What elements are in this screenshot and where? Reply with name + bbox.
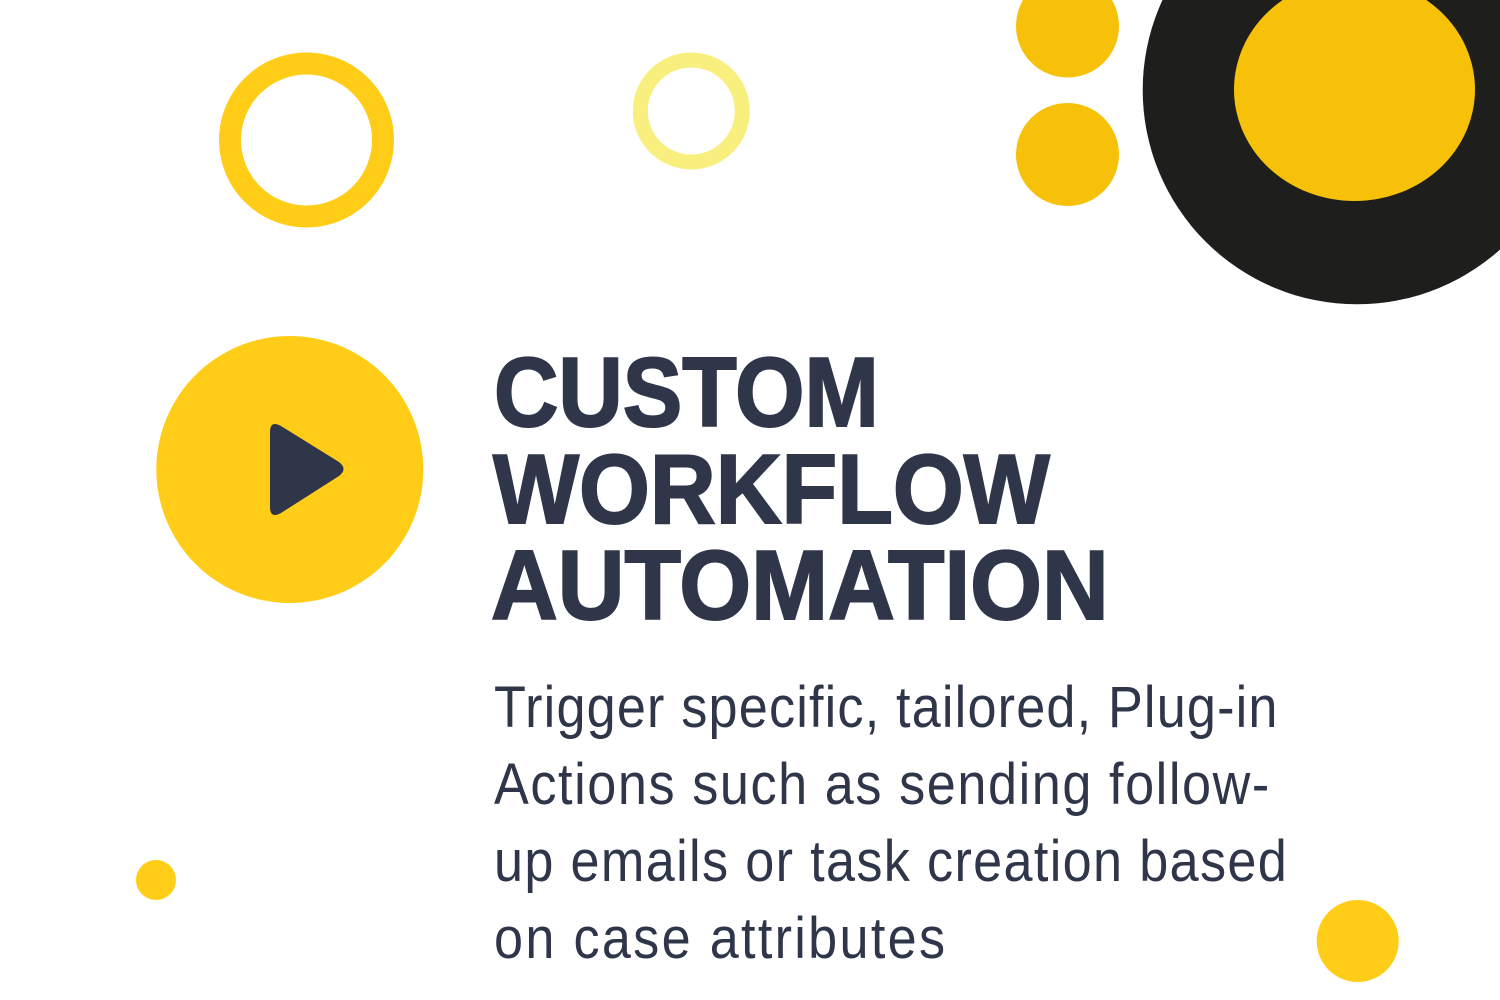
body text: up emails or task creation based — [494, 829, 1288, 894]
ring: large yellow — [230, 64, 383, 216]
body text: Actions such as sending follow- — [494, 752, 1271, 817]
icon: play button — [156, 336, 423, 603]
body text — [494, 675, 1288, 971]
body text: on case attributes — [494, 906, 947, 971]
title — [491, 337, 1109, 640]
ring: pale yellow — [640, 60, 742, 162]
circle: bottom right dot — [1317, 900, 1399, 982]
circle: top dot — [1016, 0, 1119, 78]
circle: yellow inner disc — [1234, 0, 1475, 201]
title: CUSTOM — [494, 337, 879, 447]
circle: second dot — [1016, 103, 1119, 206]
title: WORKFLOW — [493, 434, 1050, 544]
circle: small left dot — [136, 860, 176, 900]
title: AUTOMATION — [491, 530, 1109, 640]
body text: Trigger specific, tailored, Plug-in — [494, 675, 1279, 740]
circle: black disc — [1143, 0, 1500, 304]
